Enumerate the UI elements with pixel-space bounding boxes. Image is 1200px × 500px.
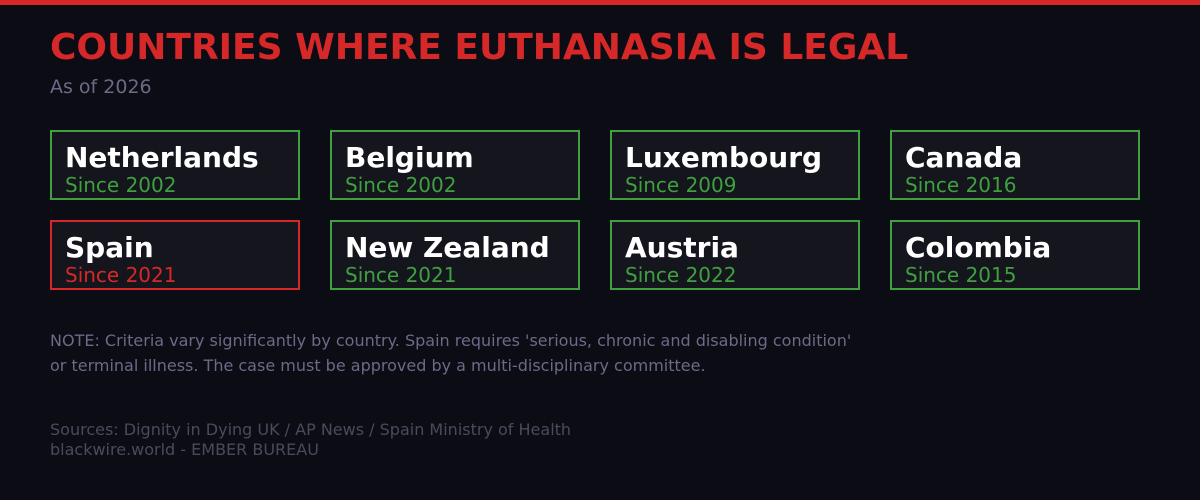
panel: Belgium: Belgium: [345, 141, 474, 174]
panel: Spain: [50, 220, 300, 290]
sources: [50, 420, 571, 459]
panel: Belgium: [330, 130, 580, 200]
panel: Colombia: Colombia: [905, 231, 1051, 264]
panel: Luxembourg: [610, 130, 860, 200]
top bar: [0, 0, 1200, 5]
panel: Netherlands: Netherlands: [65, 141, 259, 174]
panel: Luxembourg: Since 2009: [625, 173, 736, 197]
sources: blackwire.world - EMBER BUREAU: [50, 440, 319, 459]
panel: Colombia: Since 2015: [905, 263, 1016, 287]
panel: Austria: [610, 220, 860, 290]
panel: Spain: Spain: [65, 231, 154, 264]
panel: New Zealand: Since 2021: [345, 263, 456, 287]
panel: New Zealand: New Zealand: [345, 231, 550, 264]
panel: Canada: [890, 130, 1140, 200]
panel: Austria: Since 2022: [625, 263, 736, 287]
title: COUNTRIES WHERE EUTHANASIA IS LEGAL: [50, 27, 908, 68]
panel: Canada: Canada: [905, 141, 1022, 174]
note text: NOTE: Criteria vary significantly by country. Spain requires 'serious, chronic and disabling condition': [50, 331, 851, 350]
panel: New Zealand: [330, 220, 580, 290]
note text: or terminal illness. The case must be approved by a multi-disciplinary committee.: [50, 356, 706, 375]
panel: Spain: Since 2021: [65, 263, 176, 287]
panel: Netherlands: [50, 130, 300, 200]
panel: Austria: Austria: [625, 231, 739, 264]
panel: Netherlands: Since 2002: [65, 173, 176, 197]
panel: Belgium: Since 2002: [345, 173, 456, 197]
note text: [50, 331, 851, 375]
panel: Canada: Since 2016: [905, 173, 1016, 197]
panel: Colombia: [890, 220, 1140, 290]
sources: Sources: Dignity in Dying UK / AP News / Spain Ministry of Health: [50, 420, 571, 439]
subtitle: As of 2026: [50, 76, 152, 98]
panel: Luxembourg: Luxembourg: [625, 141, 822, 174]
